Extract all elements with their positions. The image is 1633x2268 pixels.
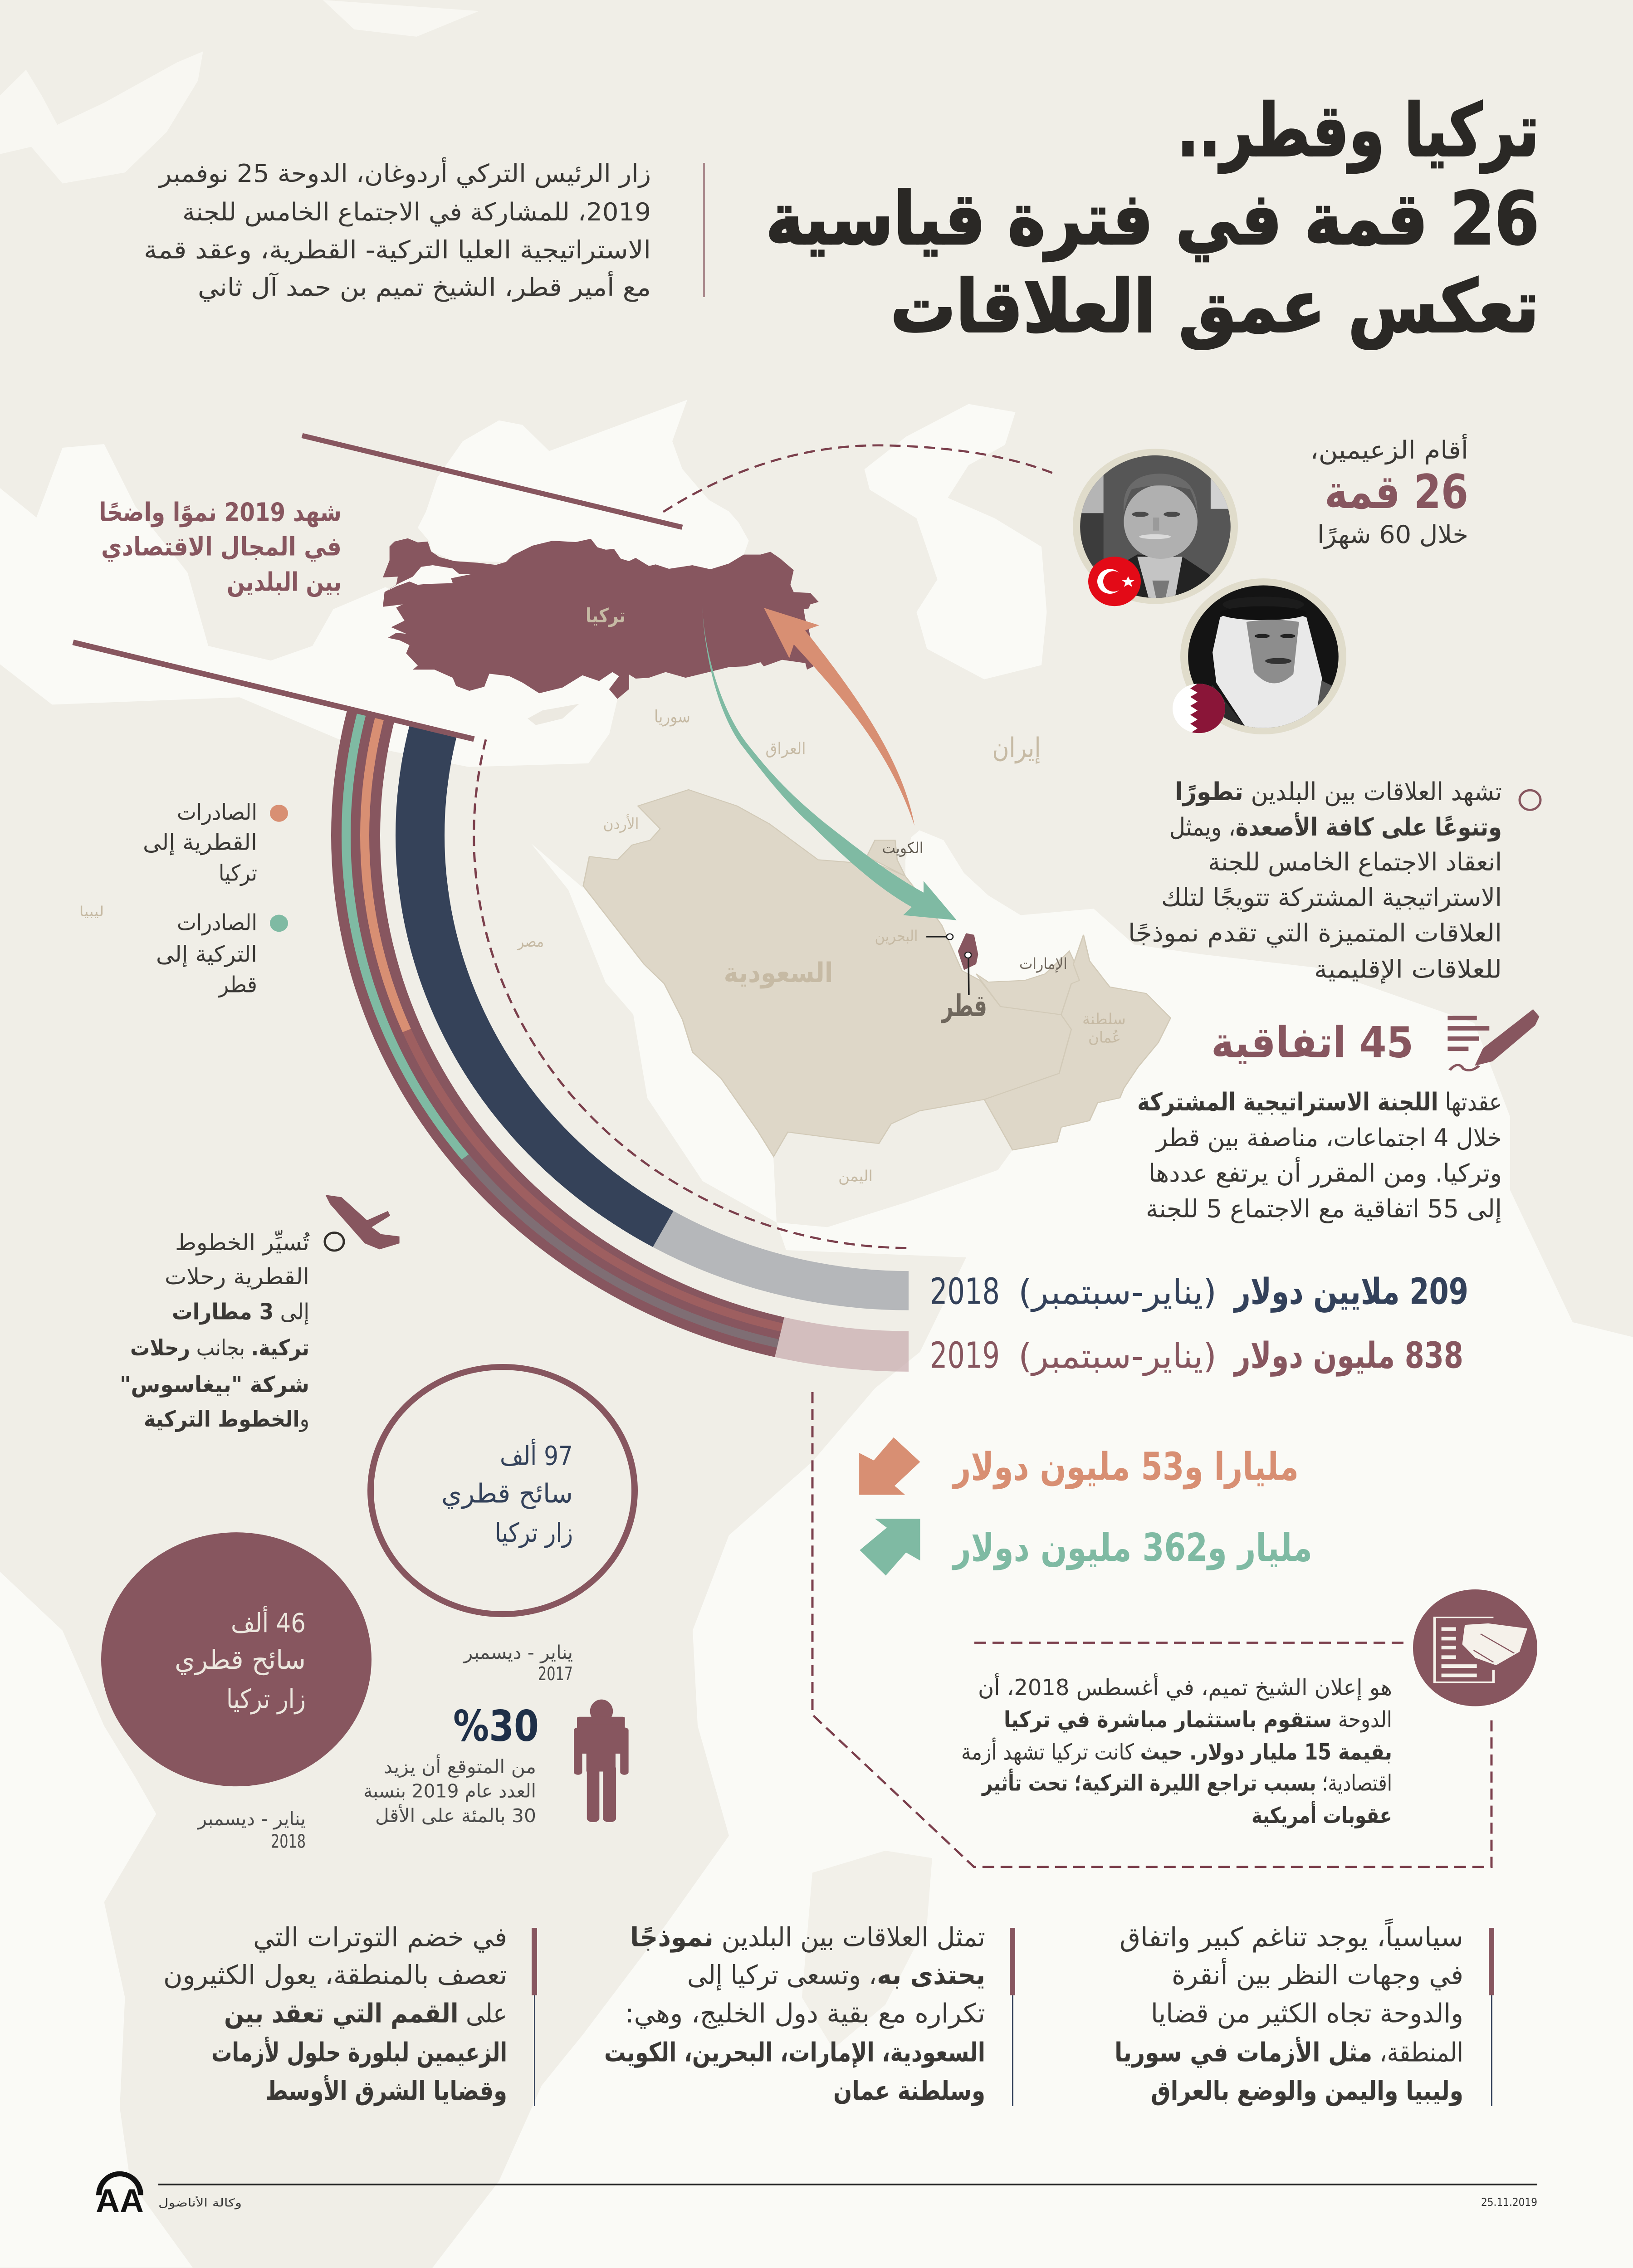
circle: tourists 2017 xyxy=(371,1367,635,1614)
statistic: 30 percent xyxy=(363,1701,539,1827)
map country labels: قطر xyxy=(941,989,987,1024)
icon: traveller xyxy=(574,1700,629,1822)
column: politics: والدوحة تجاه الكثير من قضايا xyxy=(1151,1998,1463,2029)
map country labels: الأردن xyxy=(603,814,639,833)
sea: caspian xyxy=(865,404,1046,679)
legend: export colours: التركية إلى xyxy=(156,941,257,967)
slanted line: arc top xyxy=(73,642,474,739)
arc segment: 2019 faded xyxy=(775,1317,909,1372)
text block: relations: تشهد العلاقات بين البلدين تطورًا xyxy=(1175,777,1502,806)
text block: flights: تُسيِّر الخطوط xyxy=(175,1229,310,1256)
text block: investment: هو إعلان الشيخ تميم، في أغسطس 2018، أن xyxy=(978,1673,1392,1701)
circle: tourists 2017: زار تركيا xyxy=(495,1518,573,1548)
export value: qatar: مليارا و53 مليون دولار xyxy=(952,1444,1299,1490)
chart label: 2018: 209 ملايين دولار xyxy=(1233,1271,1468,1313)
text block: relations: العلاقات المتميزة التي تقدم نموذجًا xyxy=(1128,919,1502,948)
circle: tourists 2018 xyxy=(101,1532,372,1786)
dashed box: investment xyxy=(812,1392,1491,1867)
text block: investment: الدوحة ستقوم باستثمار مباشرة في تركيا xyxy=(1004,1706,1392,1733)
text block: relations: للعلاقات الإقليمية xyxy=(1314,955,1502,984)
export value: turkey: مليار و362 مليون دولار xyxy=(952,1525,1312,1570)
growth statement: شهد 2019 نموًا واضحًا xyxy=(99,497,342,528)
sea: baltic and north patches xyxy=(0,0,479,184)
map: saudi arabia, kuwait, uae, oman xyxy=(583,790,1171,1157)
date: 2018: 2018 xyxy=(271,1831,306,1853)
text block: flights: إلى 3 مطارات xyxy=(172,1299,309,1325)
map country labels: تركيا xyxy=(586,604,626,627)
legend: export colours: الصادرات xyxy=(177,799,257,825)
arc segment: 2019 band with export stripes xyxy=(331,711,784,1357)
chart: trade arcs xyxy=(331,299,1486,1372)
text block: flights xyxy=(120,1229,344,1432)
chart label: 2019: 2019 xyxy=(930,1335,1000,1377)
footer: agency logo: AA xyxy=(96,2182,144,2219)
icon: plane xyxy=(325,1195,400,1249)
column: model: تمثل العلاقات بين البلدين نموذجًا xyxy=(630,1922,985,1953)
map country labels: الإمارات xyxy=(1019,955,1067,973)
map country labels: ليبيا xyxy=(79,904,104,919)
map: turkey shape xyxy=(383,538,819,699)
text block: committee: خلال 4 اجتماعات، مناصفة بين قطر xyxy=(1155,1124,1502,1152)
column: model: السعودية، الإمارات، البحرين، الكويت xyxy=(604,2037,985,2068)
intro text block xyxy=(144,157,651,302)
growth statement: بين البلدين xyxy=(227,567,342,597)
column: tensions xyxy=(163,1922,537,2106)
summits statistic: خلال 60 شهرًا xyxy=(1317,521,1468,549)
land: yemen xyxy=(773,1099,1012,1227)
legend: export colours: قطر xyxy=(217,972,257,998)
column: model: تكراره مع بقية دول الخليج، وهي: xyxy=(625,1998,985,2029)
arc segment: 2018 navy xyxy=(396,726,673,1247)
text block: investment: اقتصادية؛ بسبب تراجع الليرة التركية؛ تحت تأثير xyxy=(981,1768,1392,1796)
slanted line: upper xyxy=(302,435,682,527)
land: cyprus xyxy=(528,704,579,725)
column: tensions: في خضم التوترات التي xyxy=(253,1922,507,1953)
map country labels: البحرين xyxy=(875,928,918,945)
chart label: 2018 xyxy=(930,1271,1468,1313)
text block: investment xyxy=(961,1673,1392,1829)
text block: committee xyxy=(1137,1088,1502,1224)
column: tensions: على القمم التي تعقد بين xyxy=(224,1998,507,2029)
map country labels: الكويت xyxy=(882,840,924,857)
map country labels: اليمن xyxy=(838,1168,873,1185)
portrait: erdogan xyxy=(1073,449,1238,606)
text block: flights: والخطوط التركية xyxy=(144,1406,309,1432)
dashed arc: inner xyxy=(474,739,909,1248)
date: 2017: 2017 xyxy=(538,1663,573,1685)
date: 2017: يناير - ديسمبر xyxy=(463,1642,573,1664)
circle: tourists 2017: 97 ألف xyxy=(500,1439,573,1471)
circle: tourists 2018: سائح قطري xyxy=(175,1645,306,1675)
intro text block: الاستراتيجية العليا التركية- القطرية، وعقد قمة xyxy=(144,236,651,264)
text block: flights: شركة "بيغاسوس" xyxy=(120,1371,309,1398)
statistic: 30 percent: من المتوقع أن يزيد xyxy=(384,1754,536,1778)
chart label: 2018: 2018 xyxy=(930,1271,1000,1313)
map: qatar with markers xyxy=(926,933,978,995)
column: politics: وليبيا واليمن والوضع بالعراق xyxy=(1151,2076,1463,2106)
icon: arrow up right xyxy=(860,1519,920,1575)
legend: export colours: تركيا xyxy=(219,860,257,886)
column: model: وسلطنة عمان xyxy=(833,2076,985,2106)
arc segment: 2018 faded xyxy=(653,1211,909,1310)
column: politics: سياسياً، يوجد تناغم كبير واتفاق xyxy=(1120,1918,1463,1953)
chart label: 2018: (يناير-سبتمبر) xyxy=(1018,1273,1217,1312)
map country labels xyxy=(79,604,1126,1185)
map country labels: سلطنة xyxy=(1082,1011,1126,1028)
footer: date: 25.11.2019 xyxy=(1481,2196,1537,2209)
text block: committee: عقدتها اللجنة الاستراتيجية المشتركة xyxy=(1137,1088,1502,1116)
date: 2017 xyxy=(463,1642,573,1685)
column: politics xyxy=(1115,1918,1494,2106)
text block: committee: إلى 55 اتفاقية مع الاجتماع 5 للجنة xyxy=(1146,1195,1502,1224)
icon: handshake xyxy=(1413,1589,1537,1706)
text block: relations: الاستراتيجية المشتركة تتويجًا لتلك xyxy=(1161,883,1502,912)
text block: investment: بقيمة 15 مليار دولار. حيث كانت تركيا تشهد أزمة xyxy=(961,1737,1392,1765)
summits statistic: أقام الزعيمين، xyxy=(1310,434,1468,465)
map country labels: مصر xyxy=(517,933,544,951)
column: tensions: الزعيمين لبلورة حلول لأزمات xyxy=(211,2036,507,2068)
arrow: orange, qatar to turkey xyxy=(764,608,914,826)
text block: relations: وتنوعًا على كافة الأصعدة، ويمثل xyxy=(1169,811,1502,841)
arrow: teal, turkey to qatar xyxy=(702,604,957,920)
statistic: 30 percent: العدد عام 2019 بنسبة xyxy=(363,1780,536,1802)
column: tensions: تعصف بالمنطقة، يعول الكثيرون xyxy=(163,1960,507,1991)
statistic: 30 percent: 30 بالمئة على الأقل xyxy=(375,1804,536,1827)
text block: relations xyxy=(1128,777,1540,984)
text block: committee: وتركيا. ومن المقرر أن يرتفع عددها xyxy=(1149,1157,1502,1188)
legend: export colours: القطرية إلى xyxy=(143,829,257,855)
column: politics: في وجهات النظر بين أنقرة xyxy=(1172,1958,1463,1991)
agreements heading: 45 اتفاقية xyxy=(1211,1017,1413,1067)
text block: flights: تركية. بجانب رحلات xyxy=(130,1335,309,1361)
chart label: 2019: 838 مليون دولار xyxy=(1233,1335,1463,1377)
map country labels: سوريا xyxy=(654,707,690,727)
statistic: 30 percent: %30 xyxy=(453,1701,539,1751)
circle: tourists 2017: سائح قطري xyxy=(441,1478,573,1509)
growth statement: في المجال الاقتصادي xyxy=(101,532,342,562)
title: 26 قمة في فترة قياسية xyxy=(766,176,1539,261)
circle: tourists 2018: زار تركيا xyxy=(226,1684,306,1715)
flag: qatar xyxy=(1173,684,1225,733)
legend: export colours xyxy=(143,799,288,998)
sea: west africa edge xyxy=(0,1572,193,2268)
date: 2018 xyxy=(197,1808,306,1853)
text block: flights: القطرية رحلات xyxy=(165,1264,309,1290)
intro text block: 2019، للمشاركة في الاجتماع الخامس للجنة xyxy=(182,198,651,226)
intro text block: زار الرئيس التركي أردوغان، الدوحة 25 نوفمبر xyxy=(158,157,651,188)
map country labels: عُمان xyxy=(1088,1029,1121,1046)
icon: pen xyxy=(1447,1009,1539,1070)
portrait: tamim xyxy=(1173,578,1346,734)
map country labels: إيران xyxy=(993,732,1041,764)
text block: relations: انعقاد الاجتماع الخامس للجنة xyxy=(1208,848,1502,876)
circle: tourists 2018: 46 ألف xyxy=(231,1606,306,1639)
summits statistic xyxy=(1310,434,1468,549)
dashed arc: upper xyxy=(663,445,1055,512)
icon: arrow down left xyxy=(859,1437,920,1495)
chart label: 2019: (يناير-سبتمبر) xyxy=(1018,1337,1217,1376)
growth statement xyxy=(99,497,342,597)
footer: agency name: وكالة الأناضول xyxy=(158,2195,242,2209)
column: model: يحتذى به، وتسعى تركيا إلى xyxy=(687,1960,985,1991)
sea: black sea xyxy=(418,400,749,569)
sea: mediterranean xyxy=(0,444,625,767)
title xyxy=(766,88,1539,350)
chart label: 2019 xyxy=(930,1335,1463,1377)
map country labels: السعودية xyxy=(724,957,833,989)
text block: investment: عقوبات أمريكية xyxy=(1252,1801,1392,1829)
column: politics: المنطقة، مثل الأزمات في سوريا xyxy=(1115,2036,1463,2068)
summits statistic: 26 قمة xyxy=(1325,465,1468,519)
sea: red sea gulf and indian ocean xyxy=(432,830,1633,2268)
column: model xyxy=(604,1922,1015,2106)
column: tensions: وقضايا الشرق الأوسط xyxy=(265,2075,507,2106)
legend: export colours: الصادرات xyxy=(177,909,257,935)
date: 2018: يناير - ديسمبر xyxy=(197,1808,306,1830)
map country labels: العراق xyxy=(765,739,806,758)
intro text block: مع أمير قطر، الشيخ تميم بن حمد آل ثاني xyxy=(198,271,651,302)
land: madagascar xyxy=(802,1851,932,2049)
footer rule xyxy=(158,2184,1537,2185)
flag: turkey xyxy=(1088,557,1141,606)
